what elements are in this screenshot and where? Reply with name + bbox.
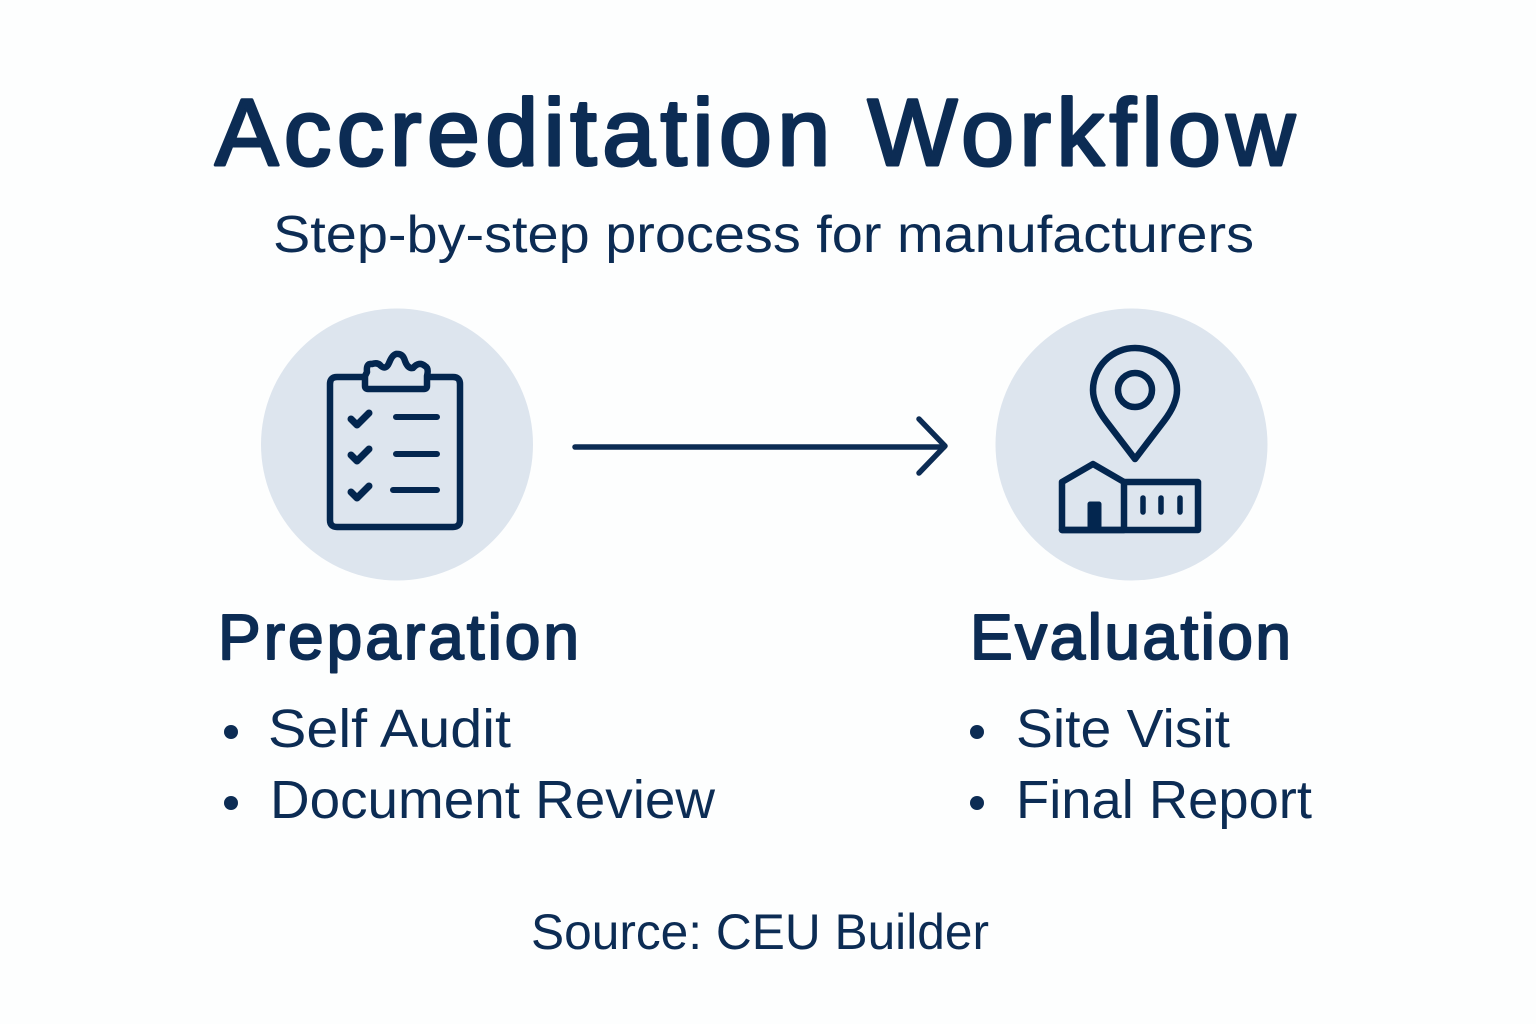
source: Source: CEU Builder — [531, 904, 989, 960]
heading: Evaluation: Evaluation — [970, 601, 1291, 673]
arrow — [575, 419, 945, 473]
list: evaluation items: Site Visit — [1016, 699, 1230, 759]
list: evaluation items: Final Report — [1016, 770, 1312, 830]
subtitle: Step-by-step process for manufacturers — [273, 206, 1254, 264]
heading: Preparation: Preparation — [218, 601, 579, 673]
list: evaluation items — [970, 699, 1312, 830]
title: Accreditation Workflow — [215, 80, 1295, 186]
list: preparation items: Document Review — [270, 770, 716, 830]
list: preparation items: Self Audit — [268, 699, 511, 759]
icon: clipboard checklist in circle — [261, 308, 533, 580]
list: preparation items — [224, 699, 716, 830]
icon: location pin and facility in circle — [996, 308, 1268, 580]
